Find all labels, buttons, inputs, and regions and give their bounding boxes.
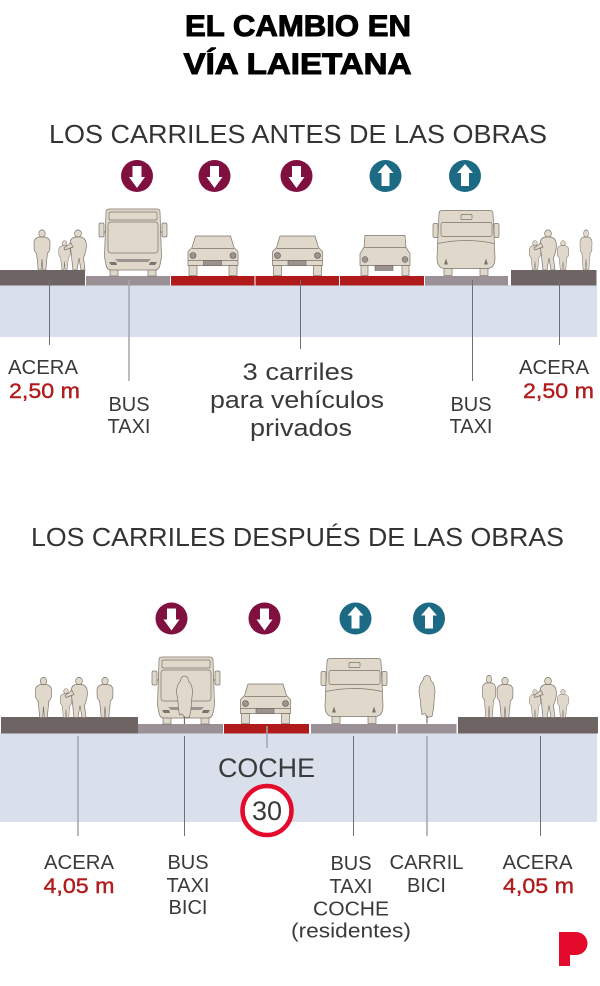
title: VÍA LAIETANA [184, 47, 412, 81]
vehicle: coche 3 [360, 236, 410, 276]
label: acera izquierda: 4,05 m [44, 875, 114, 898]
label: bus taxi coche residentes: (residentes) [291, 920, 411, 942]
label: acera izquierda [8, 357, 80, 403]
vehicle: bus con bici [152, 657, 220, 724]
label: acera izquierda: ACERA [8, 357, 79, 379]
street cross-section: después [0, 717, 598, 822]
vehicle: bus 2 [433, 210, 499, 276]
label: bus taxi bici: TAXI [167, 875, 209, 897]
label: acera izquierda [44, 852, 115, 898]
panel: carriles después [0, 522, 598, 942]
speed limit sign: 30: 30 [252, 796, 282, 826]
label: acera derecha [519, 357, 594, 403]
label: acera izquierda: 2,50 m [9, 380, 80, 403]
label: 3 carriles: para vehículos [210, 387, 384, 414]
title: EL CAMBIO EN [185, 10, 411, 43]
label: acera derecha: ACERA [502, 852, 573, 874]
label: acera izquierda: ACERA [44, 852, 115, 874]
label: acera derecha: 2,50 m [523, 380, 594, 403]
label: bus taxi derecha: TAXI [450, 416, 492, 438]
label: bus taxi coche residentes: COCHE [313, 898, 389, 920]
label: bus taxi derecha: BUS [450, 394, 492, 416]
label: 3 carriles: privados [250, 415, 352, 442]
label: carril bici: BICI [407, 875, 446, 897]
label: bus taxi derecha [450, 394, 492, 438]
label: 3 carriles [210, 359, 384, 442]
street cross-section: antes [0, 270, 597, 337]
label: carril bici: CARRIL [390, 852, 464, 874]
pedestrians: acera derecha [482, 675, 569, 718]
panel: carriles antes [0, 119, 597, 442]
label: carril bici [390, 852, 464, 897]
vehicle: bus derecha [321, 658, 387, 724]
direction arrows: después [156, 602, 445, 634]
label: bus taxi izquierda: TAXI [108, 416, 150, 438]
label: bus taxi coche residentes [291, 853, 411, 942]
vehicle: bus [99, 209, 167, 276]
vehicle: coche [240, 684, 290, 724]
label: acera derecha: 4,05 m [503, 875, 574, 898]
logo [559, 932, 588, 966]
cyclist: carril bici [419, 676, 435, 724]
label: bus taxi bici: BICI [169, 897, 207, 919]
label: coche: COCHE [218, 753, 315, 783]
direction arrows: antes [121, 160, 481, 192]
pedestrians: acera derecha [529, 230, 592, 270]
vehicle: coche 1 [188, 236, 238, 276]
label: bus taxi coche residentes: BUS [330, 853, 372, 875]
label: bus taxi bici [167, 852, 209, 919]
label: bus taxi bici: BUS [167, 852, 209, 874]
label: bus taxi izquierda: BUS [108, 394, 150, 416]
pedestrians: acera izquierda [34, 230, 86, 270]
vehicle: coche 2 [272, 236, 322, 276]
label: bus taxi izquierda [108, 394, 150, 438]
label: 3 carriles: 3 carriles [242, 359, 354, 386]
speed limit sign: 30 [242, 786, 292, 835]
leader lines: antes [50, 280, 560, 381]
heading: antes: LOS CARRILES ANTES DE LAS OBRAS [49, 119, 547, 149]
label: acera derecha: ACERA [519, 357, 590, 379]
label: acera derecha [502, 852, 574, 898]
label: bus taxi coche residentes: TAXI [330, 876, 372, 898]
leader lines: después [78, 726, 540, 836]
pedestrians: acera izquierda [36, 677, 113, 718]
title [184, 10, 412, 81]
heading: después: LOS CARRILES DESPUÉS DE LAS OBRAS [31, 522, 564, 552]
